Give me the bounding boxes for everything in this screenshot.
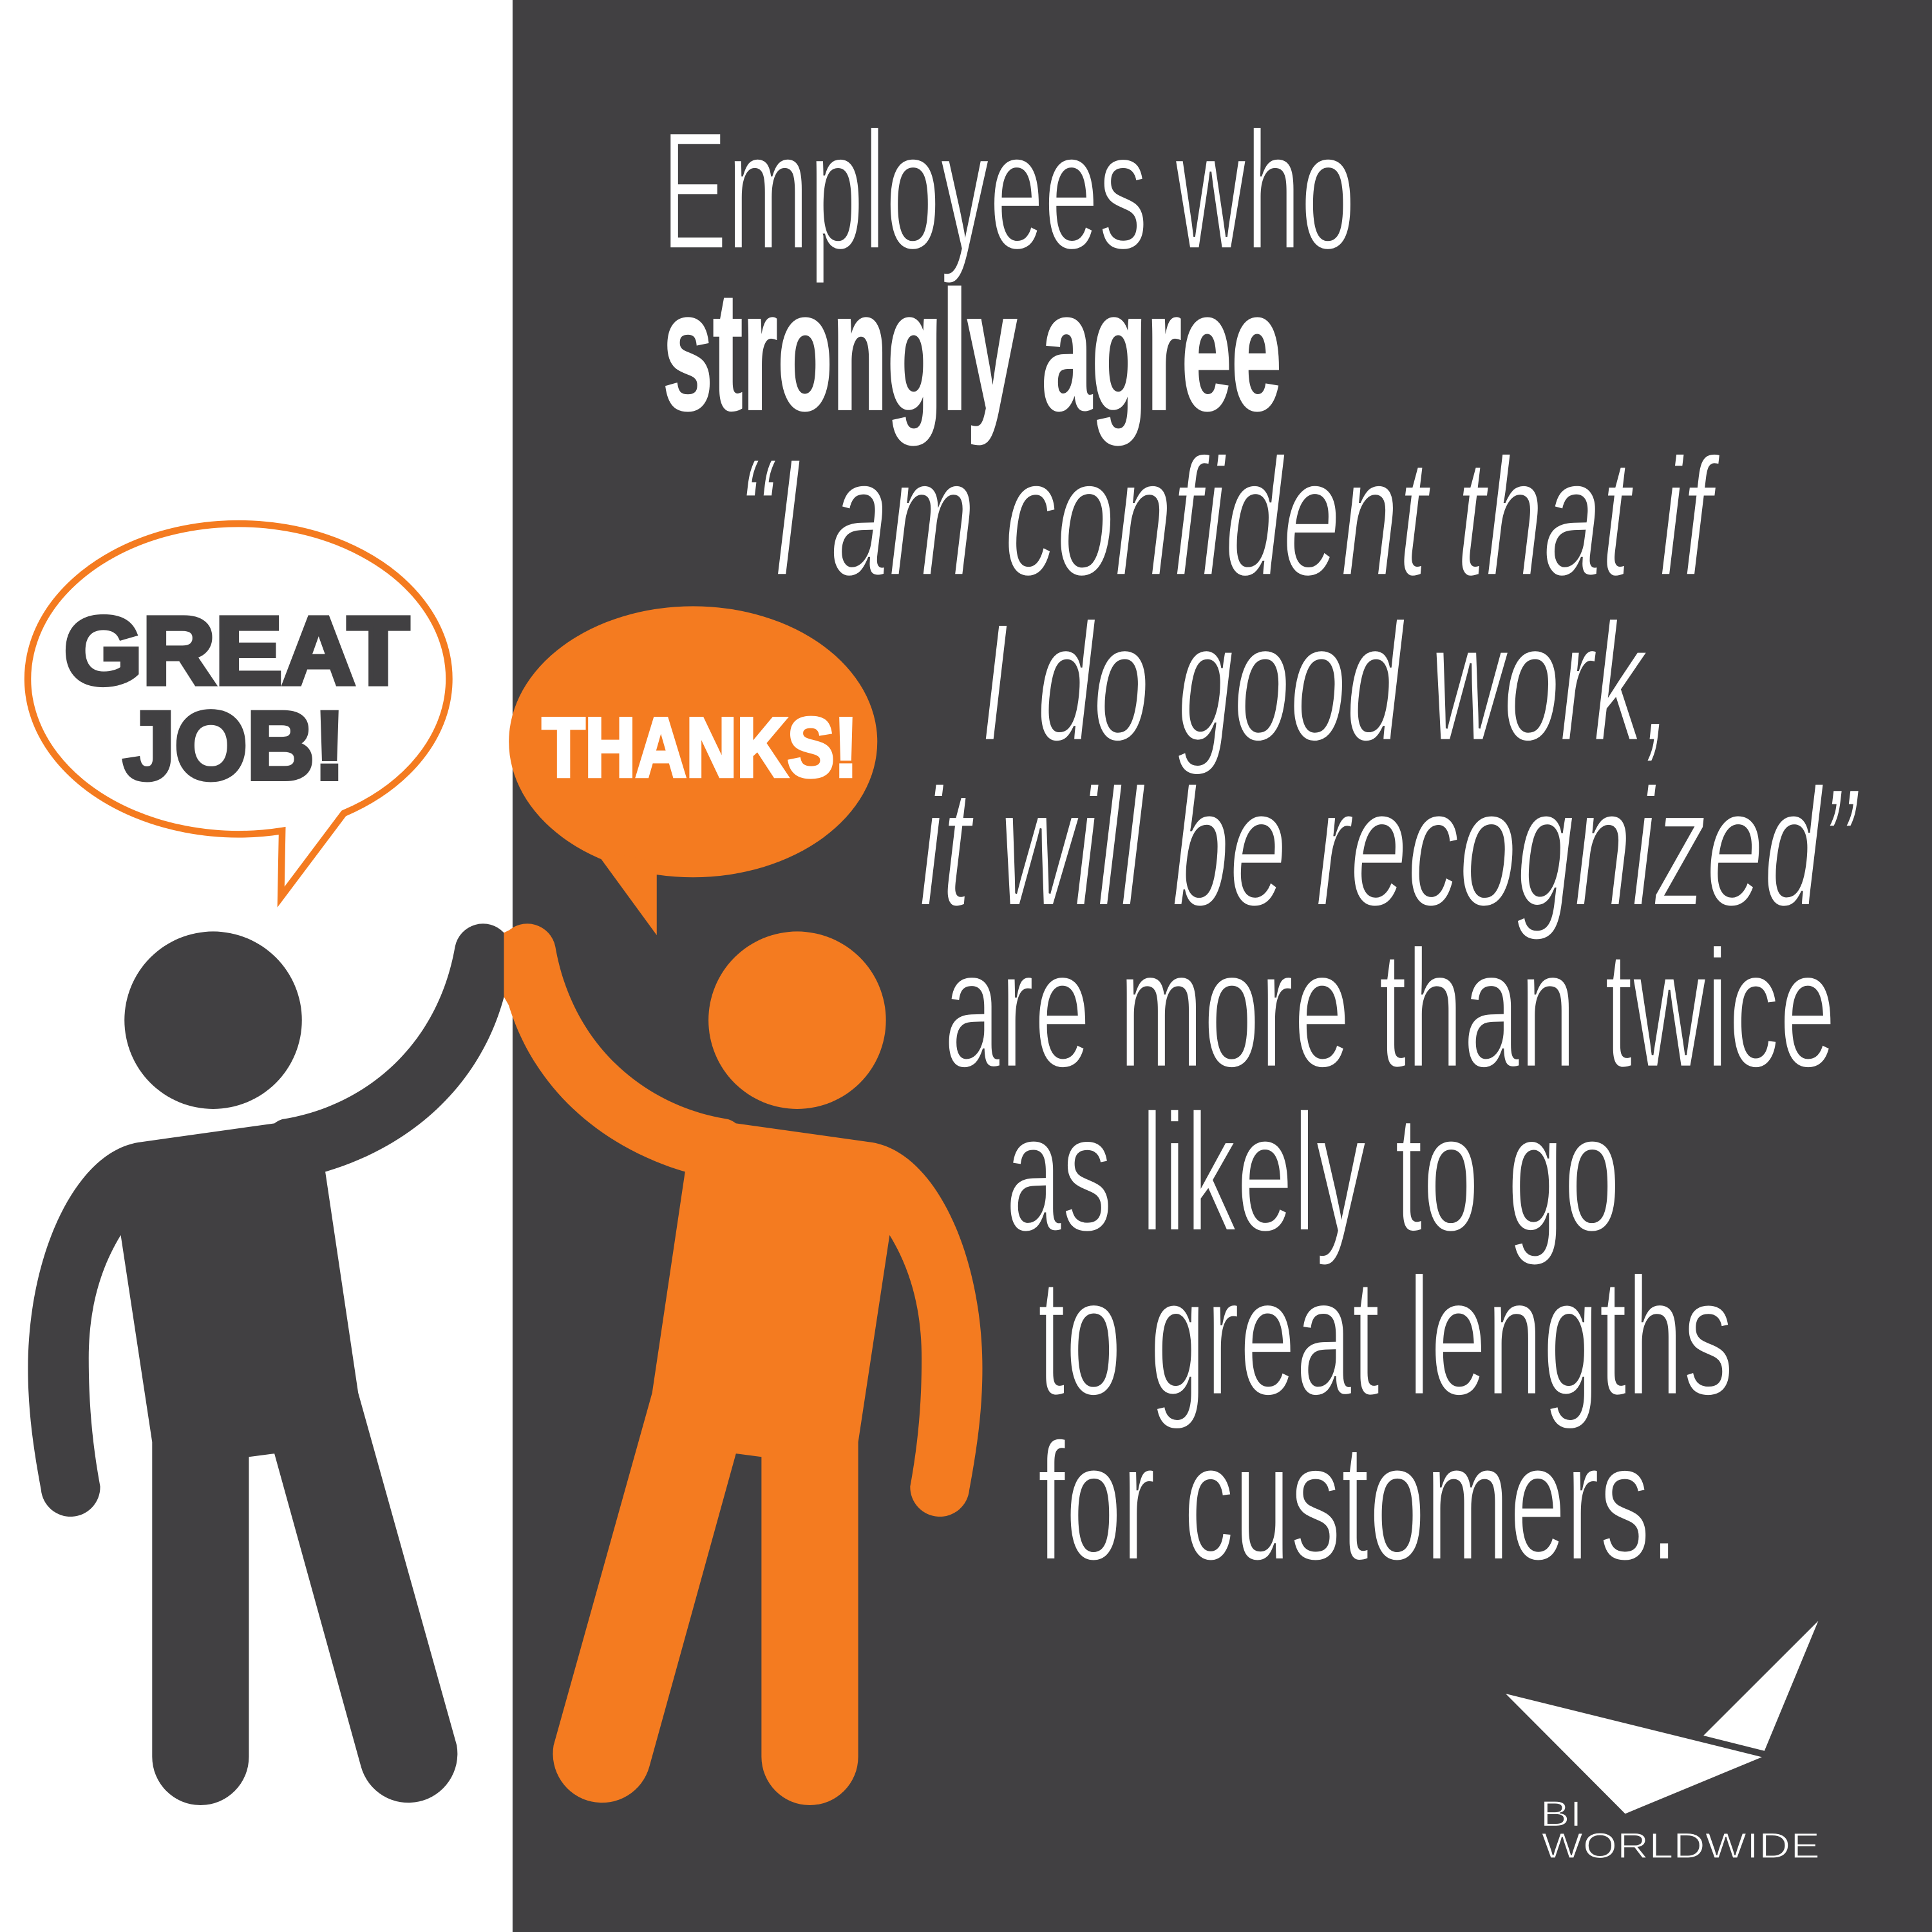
logo: BI Worldwide (1506, 1621, 1820, 1866)
head (124, 931, 302, 1109)
bubble text: JOB! (123, 692, 345, 799)
speech bubble: thanks (509, 606, 877, 935)
logo mark (1506, 1621, 1818, 1814)
bubble text: THANKS! (542, 700, 858, 794)
bubble outline (28, 524, 449, 897)
background: dark panel (513, 0, 1932, 1932)
line: employees who: Employees who (661, 96, 1356, 286)
raised hand edge (504, 931, 509, 1005)
figure: dark person giving praise (28, 923, 504, 1805)
body with raised arm (28, 923, 504, 1805)
bubble text (64, 597, 409, 799)
main statement text (661, 96, 1860, 1596)
logo wordmark (1540, 1794, 1820, 1866)
figure: orange person receiving praise (504, 923, 982, 1805)
logo wordmark: BI (1540, 1794, 1582, 1833)
bubble text: GREAT (64, 597, 409, 705)
head (708, 931, 886, 1109)
body with raised arm (506, 923, 982, 1805)
logo wordmark: WORLDWIDE (1541, 1826, 1820, 1866)
line: strongly agree: strongly agree (663, 256, 1282, 446)
bubble shape (509, 606, 877, 935)
speech bubble: great job (28, 524, 449, 897)
